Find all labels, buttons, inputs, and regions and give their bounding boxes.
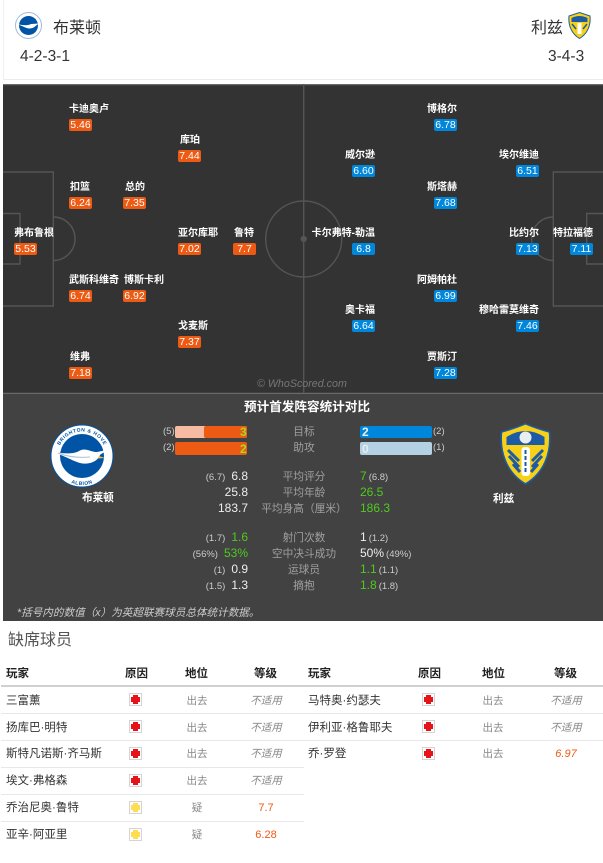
- player: 扣篮: [69, 181, 92, 209]
- row: 马特奥·约瑟夫: 马特奥·约瑟夫: [308, 695, 381, 707]
- row: 乔治尼奥·鲁特: 疑: [192, 802, 202, 814]
- player: 比约尔: [509, 227, 539, 255]
- row: 斯特凡诺斯·齐马斯: 斯特凡诺斯·齐马斯: [6, 748, 102, 760]
- stat row: dribbles away: 1.1(1.1): [360, 562, 398, 576]
- home team label: 布莱顿: [82, 492, 114, 504]
- stat row: aerial duels home: (56%) 53%: [193, 546, 248, 560]
- player: 穆哈雷莫维奇: [479, 304, 539, 332]
- table header: 原因: [125, 668, 148, 680]
- player: 亚尔库耶: 亚尔库耶: [178, 228, 218, 239]
- player: 博格尔: [427, 103, 457, 131]
- text: 7.28: [435, 367, 456, 379]
- stat row: aerial duels label: 空中决斗成功: [272, 548, 336, 560]
- stat: assists bars: 2: [240, 442, 247, 456]
- row: 乔治尼奥·鲁特: 7.7: [258, 802, 274, 814]
- row: 乔治尼奥·鲁特: [1, 795, 304, 822]
- row: 马特奥·约瑟夫: 不适用: [550, 695, 582, 707]
- table header: 玩家: [308, 668, 331, 680]
- player: 特拉福德: 特拉福德: [553, 228, 593, 239]
- stat: assists bars: (2): [163, 442, 175, 453]
- row: 马特奥·约瑟夫: 出去: [482, 695, 504, 707]
- player: 奥卡福: 奥卡福: [345, 305, 375, 316]
- stat row: dribbles home: (1) 0.9: [214, 562, 248, 576]
- label: assists: 助攻: [293, 442, 315, 454]
- stat row: average rating away: 7(6.8): [360, 469, 388, 483]
- stat: assists bars: [163, 442, 247, 456]
- row: 乔·罗登: 6.97: [555, 748, 577, 760]
- stat row: tackles home: (1.5) 1.3: [206, 578, 248, 592]
- stat row: shots label: 射门次数: [283, 532, 325, 544]
- away team label: 利兹: [493, 493, 514, 505]
- row: 埃文·弗格森: 出去: [186, 775, 208, 787]
- player: 比约尔: 比约尔: [509, 228, 539, 239]
- player: 贾斯汀: [427, 351, 457, 379]
- stat: goals bars: (5): [163, 426, 175, 437]
- player: 威尔逊: 威尔逊: [345, 150, 375, 161]
- text: 7.35: [124, 197, 145, 209]
- home formation: 4-2-3-1: [20, 48, 70, 65]
- text: 6.99: [435, 290, 456, 302]
- text: 7.68: [435, 197, 456, 209]
- text: 7.02: [179, 243, 200, 255]
- text: 6.64: [353, 320, 374, 332]
- home team crest small: [15, 12, 42, 39]
- stat row: average height away: 186.3: [360, 501, 390, 515]
- player: 奥卡福: [345, 304, 375, 332]
- text: 6.8: [356, 243, 371, 255]
- text: 6.24: [70, 197, 91, 209]
- row: 乔·罗登: 出去: [482, 748, 504, 760]
- stat row: shots away: 1(1.2): [360, 530, 388, 544]
- watermark: © WhoScored.com: [257, 378, 347, 390]
- away team crest small: [568, 12, 591, 39]
- text: 6.74: [70, 290, 91, 302]
- home team name: 布莱顿: [53, 20, 101, 37]
- row: 伊利亚·格鲁耶夫: 出去: [482, 722, 504, 734]
- player: 总的: [123, 181, 146, 209]
- label: goals: 目标: [293, 426, 315, 438]
- text: 7.46: [517, 320, 538, 332]
- away assists bar: 0: [362, 442, 369, 456]
- away goals bar: 2: [362, 425, 369, 439]
- text: 7.13: [517, 243, 538, 255]
- panel: lineup stats comparison: [3, 394, 603, 621]
- row: 扬库巴·明特: 扬库巴·明特: [6, 722, 67, 734]
- row: 扬库巴·明特: 出去: [186, 722, 208, 734]
- player: 戈麦斯: 戈麦斯: [178, 321, 208, 332]
- pitch: [3, 84, 603, 394]
- row: 亚辛·阿亚里: 疑: [192, 829, 202, 841]
- player: 卡迪奥卢: 卡迪奥卢: [69, 104, 109, 115]
- player: 阿姆帕杜: [417, 274, 457, 302]
- row: 斯特凡诺斯·齐马斯: 出去: [186, 748, 208, 760]
- player: 卡尔弗特-勒温: [312, 227, 375, 255]
- text: 7.7: [237, 243, 252, 255]
- panel heading: 预计首发阵容统计对比: [244, 400, 370, 414]
- player: 埃尔维迪: [499, 149, 539, 177]
- icon: Leeds crest: [500, 423, 551, 485]
- player: 鲁特: 鲁特: [234, 228, 254, 239]
- away assists bar: (1): [433, 442, 445, 453]
- icon: Brighton crest: [50, 424, 114, 488]
- away assists bar: [360, 442, 445, 456]
- row: 乔·罗登: [303, 741, 603, 767]
- stat row: average age away: 26.5: [360, 485, 383, 499]
- player: 穆哈雷莫维奇: 穆哈雷莫维奇: [479, 305, 539, 316]
- player: 弗布鲁根: [14, 227, 54, 255]
- player: 武斯科维奇: 武斯科维奇: [69, 275, 119, 286]
- stat row: aerial duels away: 50%(49%): [360, 546, 411, 560]
- stat row: average rating label: 平均评分: [283, 471, 325, 483]
- stat row: tackles label: 摘抱: [293, 580, 315, 592]
- player: 维弗: 维弗: [70, 352, 90, 363]
- icon: Brighton crest: ALBION: [71, 480, 92, 485]
- table header: 地位: [482, 668, 505, 680]
- table header: 等级: [254, 668, 277, 680]
- row: 伊利亚·格鲁耶夫: [303, 714, 603, 741]
- text: 7.44: [179, 150, 200, 162]
- row: 扬库巴·明特: [1, 714, 304, 741]
- text: 5.53: [15, 243, 36, 255]
- table header: [303, 660, 603, 687]
- row: 埃文·弗格森: 埃文·弗格森: [6, 775, 67, 787]
- away goals bar: [360, 425, 445, 439]
- player: 弗布鲁根: 弗布鲁根: [14, 228, 54, 239]
- text: 7.11: [572, 243, 591, 255]
- row: 三富薰: 出去: [186, 695, 208, 707]
- text: 6.78: [435, 119, 456, 131]
- row: 埃文·弗格森: 不适用: [250, 775, 282, 787]
- stat: goals bars: 3: [240, 425, 247, 439]
- table header: 玩家: [6, 668, 29, 680]
- text: 6.51: [517, 165, 538, 177]
- player: 博斯卡利: 博斯卡利: [124, 275, 164, 286]
- icon: Brighton crest: BRIGHTON & HOVE: [57, 428, 107, 446]
- player: 卡尔弗特-勒温: 卡尔弗特-勒温: [312, 228, 375, 239]
- section heading: missing players: 缺席球员: [8, 632, 72, 649]
- stat row: average height home: 183.7: [218, 501, 248, 515]
- player: 鲁特: [233, 227, 256, 255]
- text: 7.37: [179, 336, 200, 348]
- stat row: shots home: (1.7) 1.6: [206, 530, 248, 544]
- row: 伊利亚·格鲁耶夫: 不适用: [550, 722, 582, 734]
- table header: [1, 660, 304, 687]
- away goals bar: (2): [433, 426, 445, 437]
- row: 马特奥·约瑟夫: [303, 686, 603, 714]
- row: 亚辛·阿亚里: 6.28: [255, 829, 277, 841]
- row: 扬库巴·明特: 不适用: [250, 722, 282, 734]
- player: 戈麦斯: [178, 320, 208, 348]
- table header: 等级: [554, 668, 577, 680]
- stat row: average rating home: (6.7) 6.8: [206, 469, 248, 483]
- away formation: 3-4-3: [548, 48, 584, 65]
- stat row: average height label: 平均身高（厘米）: [261, 503, 347, 515]
- match header: [3, 0, 603, 80]
- stat: goals bars: [163, 425, 247, 439]
- player: 斯塔赫: [427, 181, 457, 209]
- text: 6.92: [124, 290, 145, 302]
- row: 斯特凡诺斯·齐马斯: [1, 741, 304, 768]
- stat row: tackles away: 1.8(1.8): [360, 578, 398, 592]
- row: 乔治尼奥·鲁特: 乔治尼奥·鲁特: [6, 802, 79, 814]
- row: 亚辛·阿亚里: 亚辛·阿亚里: [6, 829, 67, 841]
- row: 三富薰: 三富薰: [6, 695, 40, 707]
- table: Brighton missing players: [1, 660, 304, 850]
- row: 斯特凡诺斯·齐马斯: 不适用: [250, 748, 282, 760]
- row: 亚辛·阿亚里: [1, 822, 304, 848]
- player: 库珀: [178, 134, 201, 162]
- table header: 原因: [418, 668, 441, 680]
- stat row: average age home: 25.8: [225, 485, 248, 499]
- player: 维弗: [69, 351, 92, 379]
- footnote: *括号内的数值（x）为英超联赛球员总体统计数据。: [17, 607, 259, 619]
- player: 特拉福德: [553, 226, 593, 255]
- player: 武斯科维奇: [69, 274, 119, 302]
- row: 三富薰: [1, 686, 304, 714]
- table: Leeds missing players: [303, 660, 603, 770]
- stat row: dribbles label: 运球员: [288, 564, 320, 576]
- player: 总的: 总的: [125, 182, 145, 193]
- player: 博格尔: 博格尔: [427, 104, 457, 115]
- row: 乔·罗登: 乔·罗登: [308, 748, 346, 760]
- player: 阿姆帕杜: 阿姆帕杜: [417, 275, 457, 286]
- player: 扣篮: 扣篮: [70, 182, 90, 193]
- row: 伊利亚·格鲁耶夫: 伊利亚·格鲁耶夫: [308, 722, 392, 734]
- text: 7.18: [70, 367, 91, 379]
- player: 卡迪奥卢: [69, 103, 109, 131]
- away team name: 利兹: [531, 20, 563, 37]
- player: 威尔逊: [345, 149, 375, 177]
- pitch lines: [3, 84, 603, 394]
- row: 三富薰: 不适用: [250, 695, 282, 707]
- row: 埃文·弗格森: [1, 768, 304, 795]
- player: 亚尔库耶: [178, 227, 218, 255]
- text: 6.60: [353, 165, 374, 177]
- stat row: average age label: 平均年龄: [283, 487, 325, 499]
- player: 博斯卡利: [123, 274, 164, 302]
- player: 贾斯汀: 贾斯汀: [427, 352, 457, 363]
- table header: 地位: [185, 668, 208, 680]
- text: 5.46: [70, 119, 91, 131]
- player: 库珀: 库珀: [180, 135, 200, 146]
- player: 斯塔赫: 斯塔赫: [427, 182, 457, 193]
- player: 埃尔维迪: 埃尔维迪: [499, 150, 539, 161]
